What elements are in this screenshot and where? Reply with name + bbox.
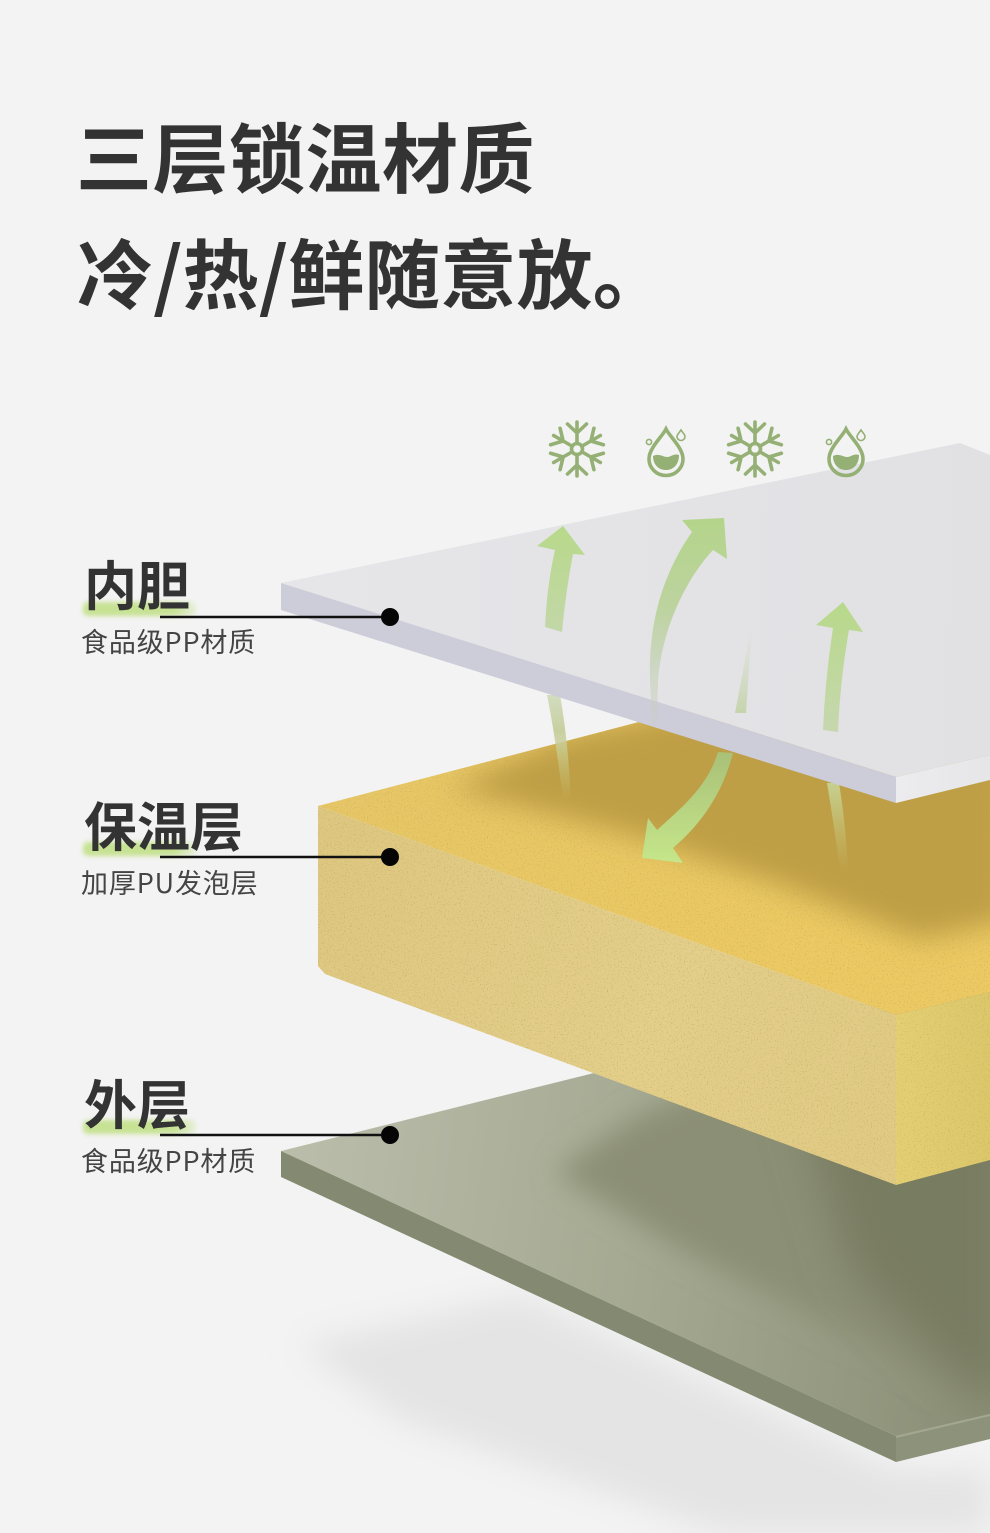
heading: 保温层: 保温层 <box>84 786 243 862</box>
text: inner liner material: 食品级PP材质 <box>81 621 256 660</box>
arrow: centre curved upward arrow <box>650 518 727 723</box>
leader line: inner liner <box>160 608 399 626</box>
label: outer layer <box>81 1064 399 1179</box>
title <box>76 99 669 325</box>
label: insulation layer <box>81 786 399 901</box>
heading: 内胆: 内胆 <box>84 545 190 621</box>
text: outer layer material: 食品级PP材质 <box>81 1140 256 1179</box>
layer: outer shell sheet <box>281 975 990 1462</box>
title: 三层锁温材质 <box>76 99 535 209</box>
arrow tail: left under sheet <box>547 695 571 800</box>
icon: snowflake 1 <box>549 422 605 476</box>
arrow: swirling down arrow on foam <box>642 752 733 863</box>
arrow: left upward arrow <box>537 526 585 632</box>
layer: PU foam insulation block <box>318 710 990 1185</box>
heading: 外层: 外层 <box>84 1064 190 1140</box>
ground shadow <box>300 1295 990 1533</box>
layer: inner PP liner sheet <box>281 443 990 803</box>
label: inner liner <box>81 545 399 660</box>
icon: water drop 2 <box>826 429 865 476</box>
arrow: faint sliver through sheet <box>735 623 752 713</box>
text: insulation material: 加厚PU发泡层 <box>81 862 259 901</box>
icon: water drop 1 <box>646 429 685 476</box>
leader line: insulation layer <box>160 848 399 866</box>
arrow: right upward arrow <box>816 602 863 732</box>
arrow tail: right under sheet <box>827 783 848 870</box>
leader line: outer layer <box>160 1126 399 1144</box>
title: 冷/热/鲜随意放。 <box>77 215 669 325</box>
icon: snowflake 2 <box>727 422 783 476</box>
